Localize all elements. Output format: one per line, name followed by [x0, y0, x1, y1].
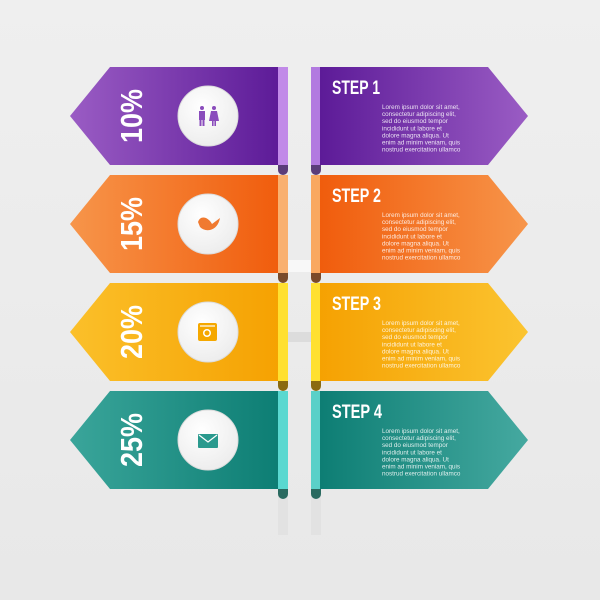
icon: camera: [198, 323, 217, 341]
right banner step 3: STEP 3: [332, 294, 381, 315]
left banner 10%: 10%: [114, 89, 149, 143]
left banner 25%: [70, 391, 288, 499]
icon: people: [199, 106, 219, 126]
row 3: yellow: [70, 283, 528, 391]
left banner 20%: [70, 283, 288, 391]
row 4: teal: [70, 391, 528, 499]
right banner step 2: [311, 175, 528, 283]
right banner step 3: sed do eiusmod tempor: [382, 334, 448, 341]
right banner step 1: Lorem ipsum dolor sit amet,: [382, 104, 460, 111]
right banner step 3: consectetur adipiscing elit,: [382, 327, 456, 334]
right banner step 4: [311, 391, 528, 499]
right banner step 1: dolore magna aliqua. Ut: [382, 132, 449, 139]
icon: bird: [198, 218, 220, 230]
right banner step 1: STEP 1: [332, 78, 380, 99]
right banner step 3: Lorem ipsum dolor sit amet,: [382, 320, 460, 327]
right banner step 1: incididunt ut labore et: [382, 125, 442, 132]
right banner step 2: Lorem ipsum dolor sit amet,: [382, 212, 460, 219]
right banner step 2: incididunt ut labore et: [382, 233, 442, 240]
left banner 15%: [70, 175, 288, 283]
right banner step 2: dolore magna aliqua. Ut: [382, 240, 449, 247]
right banner step 2: sed do eiusmod tempor: [382, 226, 448, 233]
right banner step 3: incididunt ut labore et: [382, 341, 442, 348]
right banner step 3: enim ad minim veniam, quis: [382, 356, 460, 362]
row 2: orange: [70, 175, 528, 283]
left banner 25%: 25%: [114, 413, 149, 467]
right banner step 4: sed do eiusmod tempor: [382, 442, 448, 449]
right banner step 1: sed do eiusmod tempor: [382, 118, 448, 125]
right banner step 2: STEP 2: [332, 186, 381, 207]
row 1: purple: [70, 67, 528, 175]
left banner 10%: [70, 67, 288, 175]
right banner step 2: consectetur adipiscing elit,: [382, 219, 456, 226]
right banner step 4: dolore magna aliqua. Ut: [382, 456, 449, 463]
right banner step 4: enim ad minim veniam, quis: [382, 464, 460, 470]
right banner step 4: incididunt ut labore et: [382, 449, 442, 456]
right banner step 4: Lorem ipsum dolor sit amet,: [382, 428, 460, 435]
right banner step 2: enim ad minim veniam, quis: [382, 248, 460, 254]
right banner step 1: [311, 67, 528, 175]
left banner 20%: 20%: [114, 305, 149, 359]
right banner step 3: [311, 283, 528, 391]
right banner step 4: consectetur adipiscing elit,: [382, 435, 456, 442]
right banner step 4: STEP 4: [332, 402, 382, 423]
right banner step 1: enim ad minim veniam, quis: [382, 140, 460, 146]
right banner step 1: consectetur adipiscing elit,: [382, 111, 456, 118]
icon: envelope: [198, 434, 218, 448]
right banner step 3: dolore magna aliqua. Ut: [382, 348, 449, 355]
left banner 15%: 15%: [114, 197, 149, 251]
right banner step 2: nostrud exercitation ullamco: [382, 255, 461, 262]
right banner step 4: nostrud exercitation ullamco: [382, 471, 461, 478]
right banner step 1: nostrud exercitation ullamco: [382, 147, 461, 154]
right banner step 3: nostrud exercitation ullamco: [382, 363, 461, 370]
center column: [278, 260, 321, 535]
